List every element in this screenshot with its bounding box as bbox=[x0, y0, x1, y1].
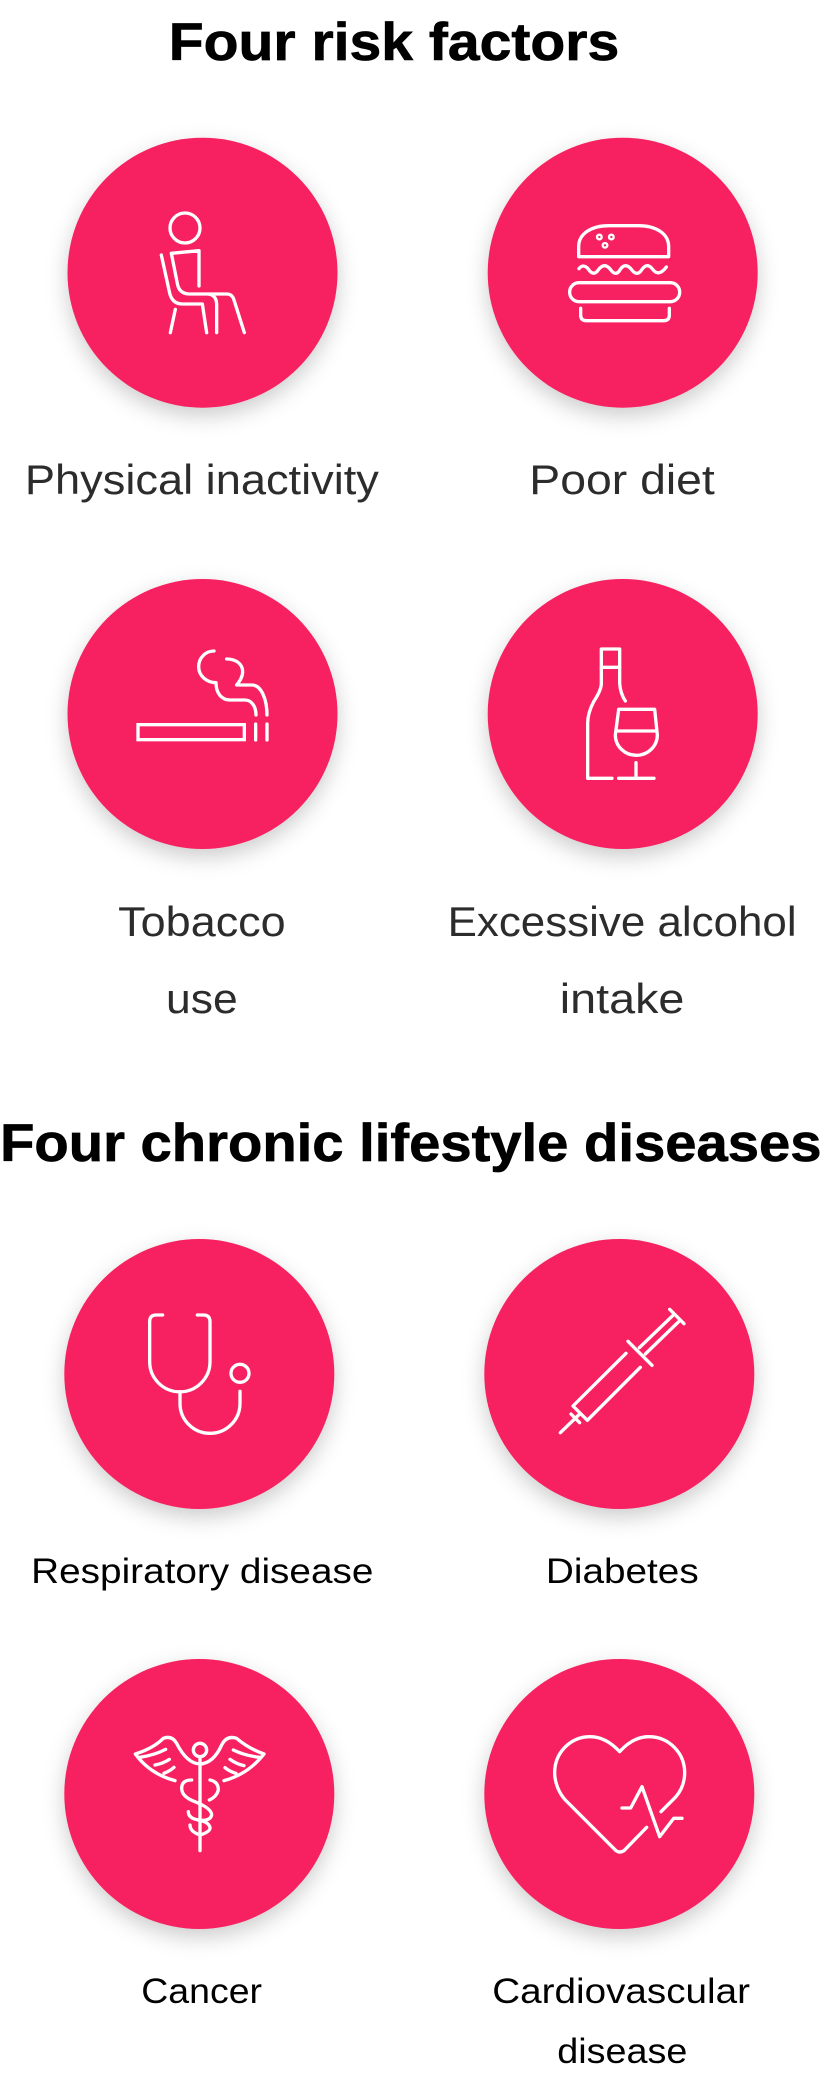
panel: tobacco use bbox=[68, 579, 338, 1022]
panel: poor diet bbox=[488, 138, 758, 503]
panel: diabetes bbox=[484, 1239, 754, 1591]
panel: respiratory disease bbox=[31, 1239, 373, 1591]
title: Four risk factors: Four risk factors bbox=[169, 13, 619, 72]
label: Excessive alcohol intake bbox=[448, 898, 797, 1022]
panel: cardiovascular disease bbox=[484, 1659, 754, 2071]
circle: respiratory disease bbox=[64, 1239, 334, 1509]
panel: physical inactivity bbox=[25, 138, 379, 503]
label: Cardiovascular disease bbox=[492, 1972, 750, 2071]
icon: stethoscope bbox=[150, 1315, 249, 1433]
icon: cigarette with smoke bbox=[138, 651, 267, 740]
icon: person sitting on chair bbox=[161, 213, 244, 333]
icon: burger bbox=[570, 226, 680, 321]
label: Tobacco use bbox=[118, 898, 286, 1022]
panel: excessive alcohol intake bbox=[448, 579, 797, 1022]
label: Respiratory disease: Respiratory disease bbox=[31, 1552, 373, 1591]
icon: syringe bbox=[560, 1309, 684, 1433]
label: Tobacco use: Tobacco bbox=[118, 898, 286, 945]
label: Diabetes: Diabetes bbox=[546, 1552, 699, 1591]
circle: cancer bbox=[64, 1659, 334, 1929]
label: Tobacco use: use bbox=[166, 975, 238, 1022]
circle: physical inactivity bbox=[68, 138, 338, 408]
label: Cancer: Cancer bbox=[141, 1972, 262, 2011]
icon: wine bottle and glass bbox=[588, 649, 657, 778]
circle: diabetes bbox=[484, 1239, 754, 1509]
label: Excessive alcohol intake: Excessive alcohol bbox=[448, 898, 797, 945]
circle: tobacco use bbox=[68, 579, 338, 849]
circle: poor diet bbox=[488, 138, 758, 408]
circle: excessive alcohol intake bbox=[488, 579, 758, 849]
title: Four chronic lifestyle diseases: Four chronic lifestyle diseases bbox=[0, 1114, 822, 1173]
label: Poor diet: Poor diet bbox=[529, 456, 715, 503]
panel: cancer bbox=[64, 1659, 334, 2011]
circle: cardiovascular disease bbox=[484, 1659, 754, 1929]
label: Excessive alcohol intake: intake bbox=[560, 975, 684, 1022]
icon: heart with pulse bbox=[555, 1737, 685, 1852]
icon: caduceus bbox=[135, 1737, 264, 1851]
label: Cardiovascular disease: disease bbox=[557, 2032, 687, 2071]
label: Physical inactivity: Physical inactivity bbox=[25, 456, 379, 503]
label: Cardiovascular disease: Cardiovascular bbox=[492, 1972, 750, 2011]
